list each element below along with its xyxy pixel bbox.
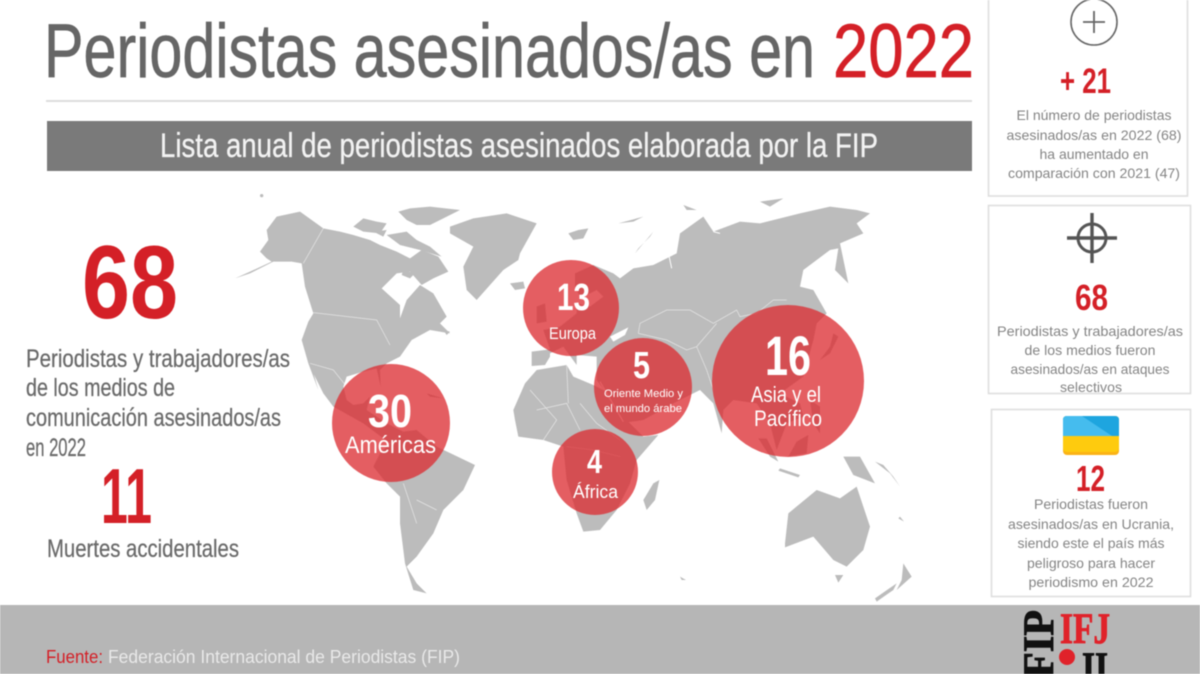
- card: increase vs 2021: ha aumentado en: [1040, 146, 1148, 162]
- card: increase vs 2021: comparación con 2021 (47): [1008, 165, 1180, 181]
- statistic: 11 accidental deaths: [47, 452, 239, 563]
- title: Periodistas asesinados/as en: [44, 9, 815, 94]
- region bubble: Oriente Medio: [594, 338, 692, 436]
- statistic: 68 total killed: Periodistas y trabajadores/as: [26, 345, 290, 373]
- region bubble: Asia y el Pacífico: Asia y el: [751, 382, 821, 407]
- region bubble: Europa: Europa: [549, 324, 596, 343]
- subtitle banner: [47, 121, 972, 171]
- statistic: 68 total killed: [26, 225, 290, 462]
- icon: Ukraine flag: [1063, 416, 1119, 455]
- region bubble: Américas: [332, 364, 450, 482]
- world map: [235, 194, 912, 602]
- card: increase vs 2021: El número de periodistas: [1016, 107, 1172, 123]
- icon: crosshair: [1067, 213, 1117, 263]
- card: increase vs 2021: + 21: [1060, 62, 1111, 101]
- region bubble: África: África: [573, 482, 619, 502]
- card: Ukraine: periodismo en 2022: [1028, 574, 1154, 590]
- card: Ukraine: siendo este el país más: [1018, 535, 1164, 551]
- card: targeted attacks: asesinados/as en ataques: [1010, 361, 1170, 377]
- region bubble: Asia y el Pacífico: 16: [765, 324, 811, 387]
- region bubble: Oriente Medio: Oriente Medio y: [604, 388, 683, 400]
- region bubble: Asia y el Pacífico: Pacífico: [754, 406, 822, 431]
- region bubble: Américas: Américas: [345, 432, 436, 459]
- region bubble: Asia y el Pacífico: [712, 305, 864, 457]
- region bubble: Oriente Medio: 5: [633, 345, 650, 387]
- card: Ukraine: [992, 410, 1190, 596]
- region bubble: Europa: [523, 260, 619, 356]
- statistic: 68 total killed: comunicación asesinados/as: [26, 404, 281, 432]
- card: Ukraine: asesinados/as en Ucrania,: [1008, 516, 1174, 532]
- card: targeted attacks: 68: [1075, 277, 1108, 318]
- logo: FIP IFJ: IFJ: [1060, 606, 1110, 653]
- statistic: 68 total killed: en 2022: [26, 434, 86, 462]
- statistic: 11 accidental deaths: 11: [101, 452, 152, 540]
- card: targeted attacks: de los medios fueron: [1024, 342, 1156, 358]
- card: targeted attacks: [988, 206, 1190, 395]
- card: increase vs 2021: [988, 0, 1188, 196]
- card: Ukraine: 12: [1076, 458, 1105, 499]
- card: Ukraine: Periodistas fueron: [1034, 496, 1148, 512]
- statistic: 68 total killed: 68: [82, 225, 178, 341]
- footer bar: [0, 605, 1200, 674]
- region bubble: Américas: 30: [368, 385, 412, 437]
- statistic: 68 total killed: de los medios de: [26, 374, 175, 402]
- title: 2022: [833, 9, 974, 94]
- subtitle banner: Lista anual de periodistas asesinados elaborada por la FIP: [160, 127, 878, 165]
- source line: Fuente:: [46, 647, 103, 667]
- region bubble: África: 4: [587, 443, 603, 480]
- region bubble: Oriente Medio: el mundo árabe: [604, 403, 682, 415]
- card: targeted attacks: Periodistas y trabajadores/as: [997, 323, 1183, 339]
- region bubble: África: [552, 429, 638, 515]
- logo: FIP IFJ: [1016, 606, 1110, 674]
- card: targeted attacks: selectivos: [1060, 379, 1122, 395]
- region bubble: Europa: 13: [557, 277, 590, 319]
- source line: Federación Internacional de Periodistas (FIP): [108, 647, 460, 667]
- card: increase vs 2021: asesinados/as en 2022 (68): [1006, 127, 1182, 143]
- card: Ukraine: peligroso para hacer: [1027, 555, 1155, 571]
- statistic: 11 accidental deaths: Muertes accidentales: [47, 535, 239, 563]
- icon: plus in circle: [1071, 0, 1117, 45]
